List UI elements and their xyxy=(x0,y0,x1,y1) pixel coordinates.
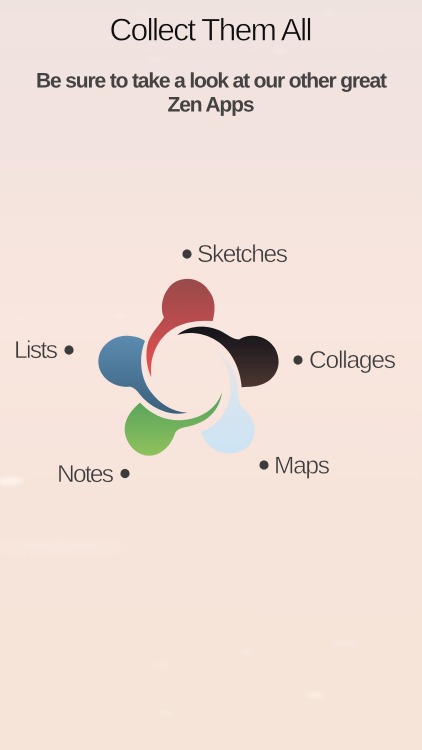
label: Sketches: Sketches xyxy=(197,241,288,268)
title: Collect Them All xyxy=(110,12,312,48)
label: Lists: Lists xyxy=(14,337,58,364)
logo: five coloured petals xyxy=(98,279,279,456)
label: Collages: Collages xyxy=(309,347,396,374)
petal: red xyxy=(146,279,215,377)
petal: green xyxy=(125,392,222,456)
label: Notes: Notes xyxy=(57,461,114,488)
petal: light blue xyxy=(201,352,255,453)
petal: blue xyxy=(98,336,187,414)
subtitle: Be sure to take a look at our other great xyxy=(36,70,387,92)
subtitle xyxy=(36,70,387,116)
subtitle: Zen Apps xyxy=(168,94,254,116)
petal: black xyxy=(177,327,279,387)
label: Maps: Maps xyxy=(274,452,330,480)
